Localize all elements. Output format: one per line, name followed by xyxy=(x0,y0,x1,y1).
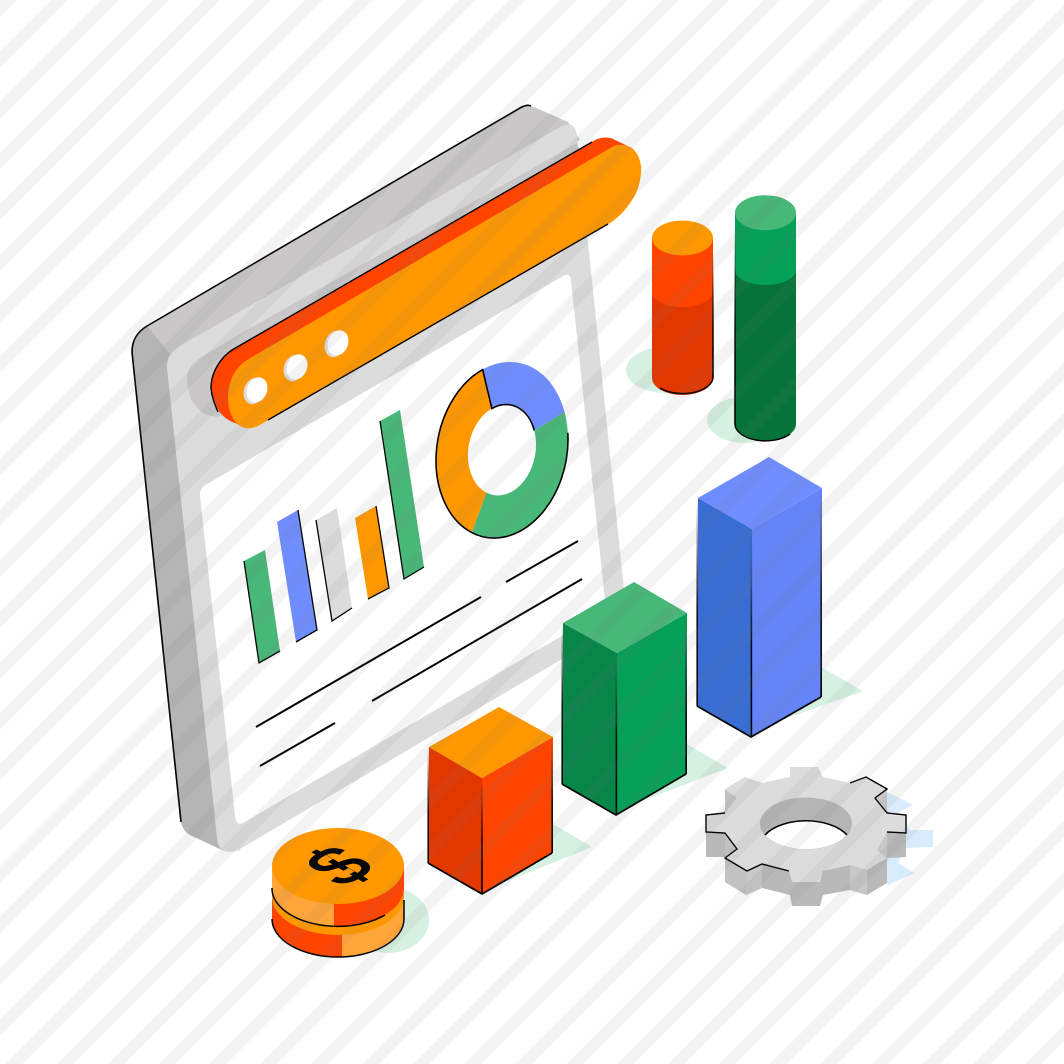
red cylinder xyxy=(652,220,714,395)
gear top face xyxy=(706,767,906,882)
green box xyxy=(561,582,687,815)
gear shadow xyxy=(870,792,933,885)
icon: dollar coins xyxy=(272,828,404,957)
window left side xyxy=(132,326,240,850)
gear side xyxy=(706,810,906,906)
screen xyxy=(200,275,606,824)
gear hole wall xyxy=(760,798,852,850)
toolbar dots xyxy=(240,327,352,407)
gear outline xyxy=(706,777,906,871)
window outline xyxy=(132,105,531,822)
toolbar shadow xyxy=(187,143,600,417)
toolbar side xyxy=(211,138,632,428)
window top side xyxy=(147,106,580,360)
icon: gear xyxy=(706,767,906,906)
window front face xyxy=(167,124,625,852)
dollar sign: $ xyxy=(288,836,392,896)
toolbar front xyxy=(228,145,641,428)
bar chart xyxy=(244,410,424,663)
blue box xyxy=(696,457,822,737)
text lines xyxy=(256,541,582,766)
toolbar edges xyxy=(211,142,608,420)
panel: browser window xyxy=(132,105,641,852)
red box xyxy=(427,707,553,894)
donut chart xyxy=(436,352,568,548)
gear hole xyxy=(765,821,847,849)
ground shadows xyxy=(347,347,863,953)
green cylinder xyxy=(734,195,796,441)
